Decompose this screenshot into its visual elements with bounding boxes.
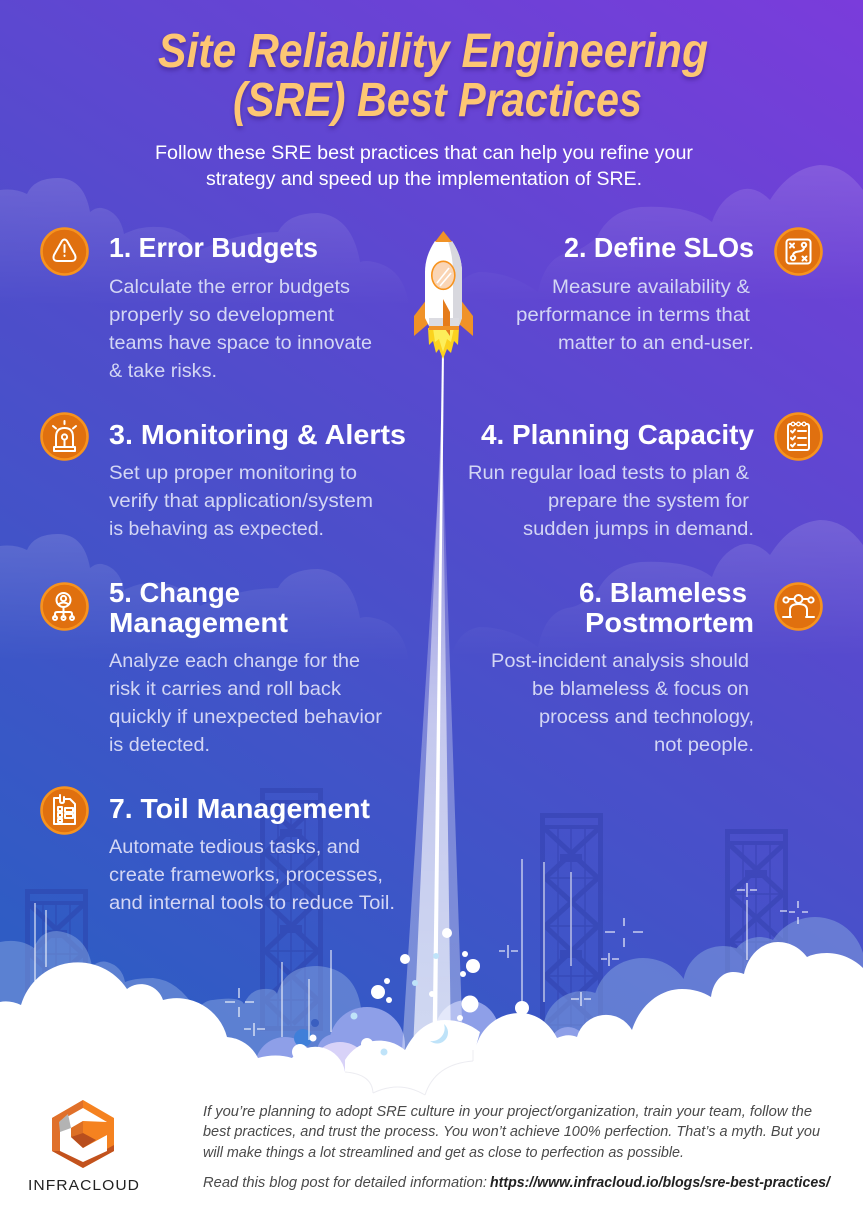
body text xyxy=(109,836,395,914)
heading: 7. Toil Management xyxy=(109,793,370,824)
heading: 6. Blameless xyxy=(579,577,747,608)
body text: Measure availability & xyxy=(552,276,750,298)
body text: Run regular load tests to plan & xyxy=(468,462,749,484)
body text: Set up proper monitoring to xyxy=(109,462,357,484)
body text: and internal tools to reduce Toil. xyxy=(109,892,395,914)
white foreground clouds xyxy=(0,942,863,1219)
blue dots behind clouds xyxy=(294,1019,319,1047)
panel: 1 error budgets xyxy=(42,228,372,382)
crescent xyxy=(430,1024,448,1044)
subtitle xyxy=(155,143,694,190)
body text xyxy=(516,276,754,354)
window xyxy=(432,261,455,289)
panel: 3 monitoring and alerts xyxy=(42,414,406,540)
body text: is behaving as expected. xyxy=(109,518,324,540)
nose cone xyxy=(435,231,452,242)
heading: 4. Planning Capacity xyxy=(481,419,754,450)
steel towers xyxy=(28,790,786,1130)
footer note: will make things a lot streamlined and get as close to perfection as possible. xyxy=(203,1145,684,1161)
body text xyxy=(109,462,373,540)
body text: Automate tedious tasks, and xyxy=(109,836,360,858)
heading: 5. Change xyxy=(109,577,240,608)
bubbles xyxy=(310,928,529,1042)
footer note: https://www.infracloud.io/blogs/sre-best-practices/ xyxy=(490,1175,832,1191)
body text: Post-incident analysis should xyxy=(491,650,749,672)
body text xyxy=(109,276,372,382)
upper background clouds xyxy=(0,165,863,360)
body text: performance in terms that xyxy=(516,304,751,326)
body text xyxy=(491,650,754,756)
icon: people network xyxy=(776,584,822,630)
title xyxy=(158,25,708,127)
icon: warning xyxy=(42,228,88,274)
body text: & take risks. xyxy=(109,360,217,382)
body text: is detected. xyxy=(109,734,210,756)
heading xyxy=(579,577,754,638)
body text: risk it carries and roll back xyxy=(109,678,341,700)
footer note: best practices, and trust the process. You won’t achieve 100% perfection. That’s a myth. But you xyxy=(203,1124,820,1140)
body text: matter to an end-user. xyxy=(558,332,754,354)
body text xyxy=(109,650,383,756)
title: (SRE) Best Practices xyxy=(233,74,642,127)
body text: quickly if unexpected behavior xyxy=(109,706,383,728)
body text: teams have space to innovate xyxy=(109,332,372,354)
lavender cloud xyxy=(310,1042,370,1102)
logo hexagon xyxy=(52,1100,114,1168)
footer note: If you’re planning to adopt SRE culture in your project/organization, train your team, follow the xyxy=(203,1104,812,1120)
logo: InfraCloud xyxy=(28,1100,140,1194)
body xyxy=(425,241,462,326)
body text: sudden jumps in demand. xyxy=(523,518,754,540)
footer note xyxy=(203,1104,832,1191)
body text: not people. xyxy=(654,734,754,756)
panel: 7 toil management xyxy=(42,788,395,914)
centre fin xyxy=(443,299,450,336)
panel: 6 blameless postmortem xyxy=(491,577,822,756)
footer note: Read this blog post for detailed information: xyxy=(203,1175,487,1191)
icon: task document xyxy=(42,788,88,834)
heading: Postmortem xyxy=(585,607,754,638)
icon: checklist xyxy=(776,414,822,460)
icon: siren xyxy=(42,414,88,460)
subtitle: strategy and speed up the implementation of SRE. xyxy=(206,169,642,190)
panel: 5 change management xyxy=(42,577,383,756)
icon: person hierarchy xyxy=(42,584,88,630)
periwinkle front clouds xyxy=(255,1000,586,1097)
sparkle marks xyxy=(225,883,808,1036)
body text: verify that application/system xyxy=(109,490,373,512)
light bubble on cloud xyxy=(380,1048,388,1056)
panel: 2 define SLOs xyxy=(516,228,822,354)
body text: properly so development xyxy=(109,304,335,326)
panel: 4 planning capacity xyxy=(468,414,822,540)
rocket xyxy=(414,231,473,359)
vertical speed lines xyxy=(35,859,747,1040)
body text xyxy=(468,462,754,540)
heading: Management xyxy=(109,607,288,638)
icon: strategy map xyxy=(776,228,822,274)
title: Site Reliability Engineering xyxy=(158,25,708,78)
body text: Analyze each change for the xyxy=(109,650,360,672)
side fins xyxy=(414,299,428,336)
body text: Calculate the error budgets xyxy=(109,276,350,298)
cloud fold shadows xyxy=(345,1050,473,1095)
body text: process and technology, xyxy=(539,706,754,728)
logo wordmark: INFRACLOUD xyxy=(28,1177,140,1194)
body text: create frameworks, processes, xyxy=(109,864,383,886)
body text: prepare the system for xyxy=(548,490,750,512)
heading: 1. Error Budgets xyxy=(109,232,318,263)
subtitle: Follow these SRE best practices that can help you refine your xyxy=(155,143,694,164)
middle background clouds xyxy=(0,520,863,716)
flame xyxy=(428,328,459,359)
body text: be blameless & focus on xyxy=(532,678,749,700)
translucent back clouds xyxy=(0,917,863,1071)
heading: 3. Monitoring & Alerts xyxy=(109,419,406,450)
heading xyxy=(109,577,288,638)
rocket exhaust beam xyxy=(402,350,463,1050)
heading: 2. Define SLOs xyxy=(564,232,754,263)
